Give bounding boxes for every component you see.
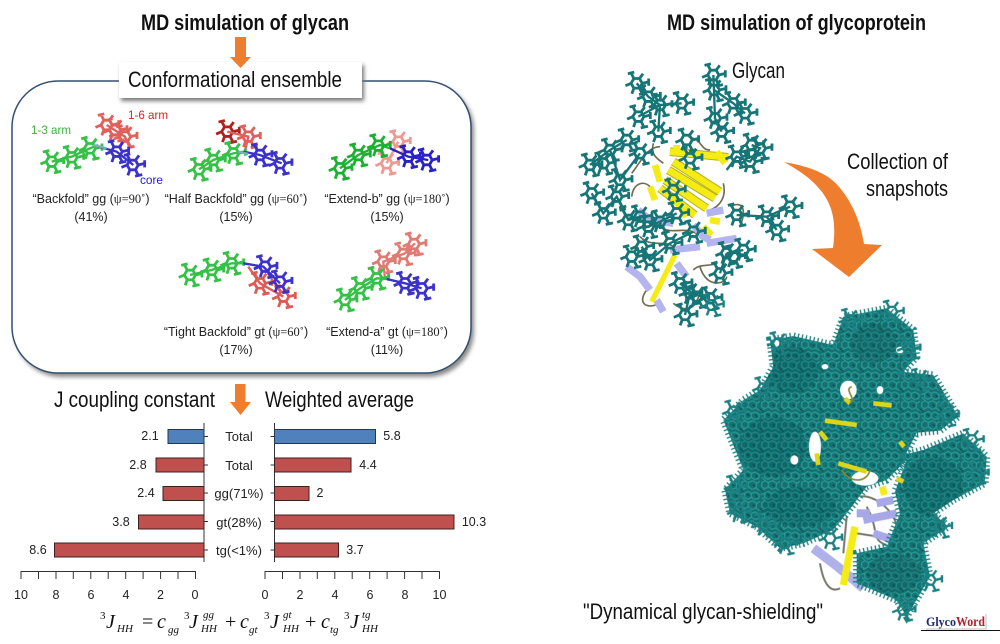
- label: glycan: Glycan: [732, 58, 785, 83]
- formula: HH: [361, 623, 379, 635]
- bar chart: weighted average: 2: [317, 486, 324, 500]
- arrow: title to ensemble: [230, 37, 251, 68]
- glycoprotein single structure: [579, 64, 802, 326]
- heading: J coupling constant: J coupling constant: [54, 387, 215, 412]
- caption: tight backfold: [164, 325, 308, 357]
- conformer: backfold gg: [40, 114, 145, 176]
- caption: half backfold: “Half Backfold” gg (ψ=60˚): [165, 192, 307, 206]
- formula: J: [350, 611, 360, 633]
- formula: J: [106, 611, 116, 633]
- formula: tg: [362, 609, 371, 621]
- text: collection of snapshots: [847, 149, 949, 201]
- formula: HH: [282, 623, 300, 635]
- axis: left: [14, 572, 199, 602]
- beta sheet: [660, 152, 728, 215]
- dark cloud shading: [740, 323, 963, 593]
- axis: right: 6: [367, 588, 374, 602]
- bar chart: weighted average: 5.8: [383, 429, 401, 443]
- formula: gt: [249, 624, 258, 636]
- caption: backfold: [32, 192, 150, 224]
- axis: left: 4: [123, 588, 130, 602]
- conformer: extend-a gt: [334, 233, 434, 311]
- formula: +: [305, 611, 316, 633]
- bar chart: weighted average: 10.3: [462, 515, 486, 529]
- left title: MD simulation of glycan: [141, 10, 349, 35]
- axis: right: [262, 572, 446, 602]
- glycoprotein ensemble structure: [700, 294, 989, 621]
- formula: gg: [203, 609, 214, 621]
- text: collection of snapshots: Collection of: [847, 149, 949, 174]
- formula: 3: [100, 610, 106, 622]
- teal edge rings: [700, 294, 989, 621]
- caption: extend-a: [326, 325, 448, 357]
- axis: left: 10: [14, 588, 28, 602]
- logo: GlycoWord: Glyco: [926, 614, 956, 629]
- bar chart: J coupling constant: 3.8: [112, 515, 130, 529]
- conformer: extend-b gg: [329, 130, 439, 180]
- caption: extend-a: (11%): [371, 343, 403, 357]
- caption: extend-b: “Extend-b” gg (ψ=180˚): [324, 192, 450, 206]
- glycan cloud: [723, 308, 987, 617]
- axis: right: 8: [402, 588, 409, 602]
- bar chart: J coupling constant: [29, 423, 208, 562]
- logo: GlycoWord: Word: [956, 614, 985, 629]
- formula: gt: [283, 609, 292, 621]
- caption: backfold: “Backfold” gg (ψ=90˚): [32, 192, 150, 206]
- formula: HH: [116, 623, 134, 635]
- bar chart: J coupling constant: 2.4: [137, 486, 155, 500]
- panel: conformational ensemble: [12, 62, 474, 377]
- axis: left: 0: [192, 588, 199, 602]
- conformer: half backfold gg: [188, 120, 292, 181]
- category labels: gg(71%): [214, 486, 264, 501]
- white gaps: [774, 340, 904, 486]
- formula: [100, 609, 379, 636]
- formula: tg: [330, 624, 339, 636]
- formula: J: [270, 611, 280, 633]
- protein lower part: [813, 490, 900, 590]
- bar chart: weighted average: 4.4: [359, 458, 377, 472]
- bar chart: J coupling constant: 8.6: [29, 543, 47, 557]
- formula: c: [240, 611, 249, 633]
- axis: right: 4: [332, 588, 339, 602]
- text: dynamical glycan-shielding: "Dynamical glycan-shielding": [583, 599, 823, 624]
- arrow: collection of snapshots: [784, 162, 882, 277]
- label box: conformational ensemble: [119, 62, 364, 101]
- bar chart: J coupling constant: 2.1: [141, 429, 159, 443]
- label box: conformational ensemble: Conformational ensemble: [128, 67, 342, 92]
- bar chart: weighted average: [270, 423, 486, 562]
- formula: c: [321, 611, 330, 633]
- label: 1-6 arm: 1-6 arm: [128, 108, 168, 122]
- label: 1-3 arm: 1-3 arm: [31, 123, 71, 137]
- caption: backfold: (41%): [74, 210, 108, 224]
- formula: +: [225, 611, 236, 633]
- caption: half backfold: [165, 192, 307, 224]
- caption: extend-b: (15%): [370, 210, 404, 224]
- heading: weighted average: Weighted average: [265, 387, 414, 412]
- protein loops: [632, 137, 743, 309]
- formula: c: [157, 611, 166, 633]
- axis: right: 0: [262, 588, 269, 602]
- caption: tight backfold: (17%): [219, 343, 253, 357]
- formula: J: [189, 611, 199, 633]
- category labels: Total: [225, 429, 253, 444]
- axis: right: 10: [433, 588, 446, 602]
- teal glycans: [579, 64, 802, 326]
- embedded yellow sheet: [817, 398, 904, 482]
- formula: 3: [264, 610, 270, 622]
- arrow: ensemble to chart: [230, 384, 251, 415]
- category labels: [214, 429, 264, 558]
- text: collection of snapshots: snapshots: [866, 176, 948, 201]
- category labels: gt(28%): [216, 515, 262, 530]
- formula: =: [142, 611, 153, 633]
- axis: left: 8: [53, 588, 60, 602]
- yellow strand: [652, 255, 675, 302]
- bar chart: J coupling constant: 2.8: [129, 458, 147, 472]
- formula: HH: [200, 623, 218, 635]
- axis: left: 2: [157, 588, 164, 602]
- category labels: tg(<1%): [216, 543, 262, 558]
- right title: MD simulation of glycoprotein: [667, 10, 926, 35]
- formula: 3: [184, 610, 190, 622]
- caption: extend-b: [324, 192, 450, 224]
- conformer: tight backfold gt: [179, 252, 295, 308]
- caption: tight backfold: “Tight Backfold” gt (ψ=60˚): [164, 325, 308, 339]
- bar chart: weighted average: 3.7: [346, 543, 364, 557]
- formula: 3: [344, 610, 350, 622]
- logo: GlycoWord: [921, 614, 1000, 630]
- caption: half backfold: (15%): [219, 210, 253, 224]
- axis: right: 2: [297, 588, 304, 602]
- label: core: core: [140, 173, 163, 187]
- lavender helices: [627, 210, 737, 312]
- formula: gg: [168, 624, 180, 636]
- caption: extend-a: “Extend-a” gt (ψ=180˚): [326, 325, 448, 339]
- category labels: Total: [225, 458, 253, 473]
- axis: left: 6: [88, 588, 95, 602]
